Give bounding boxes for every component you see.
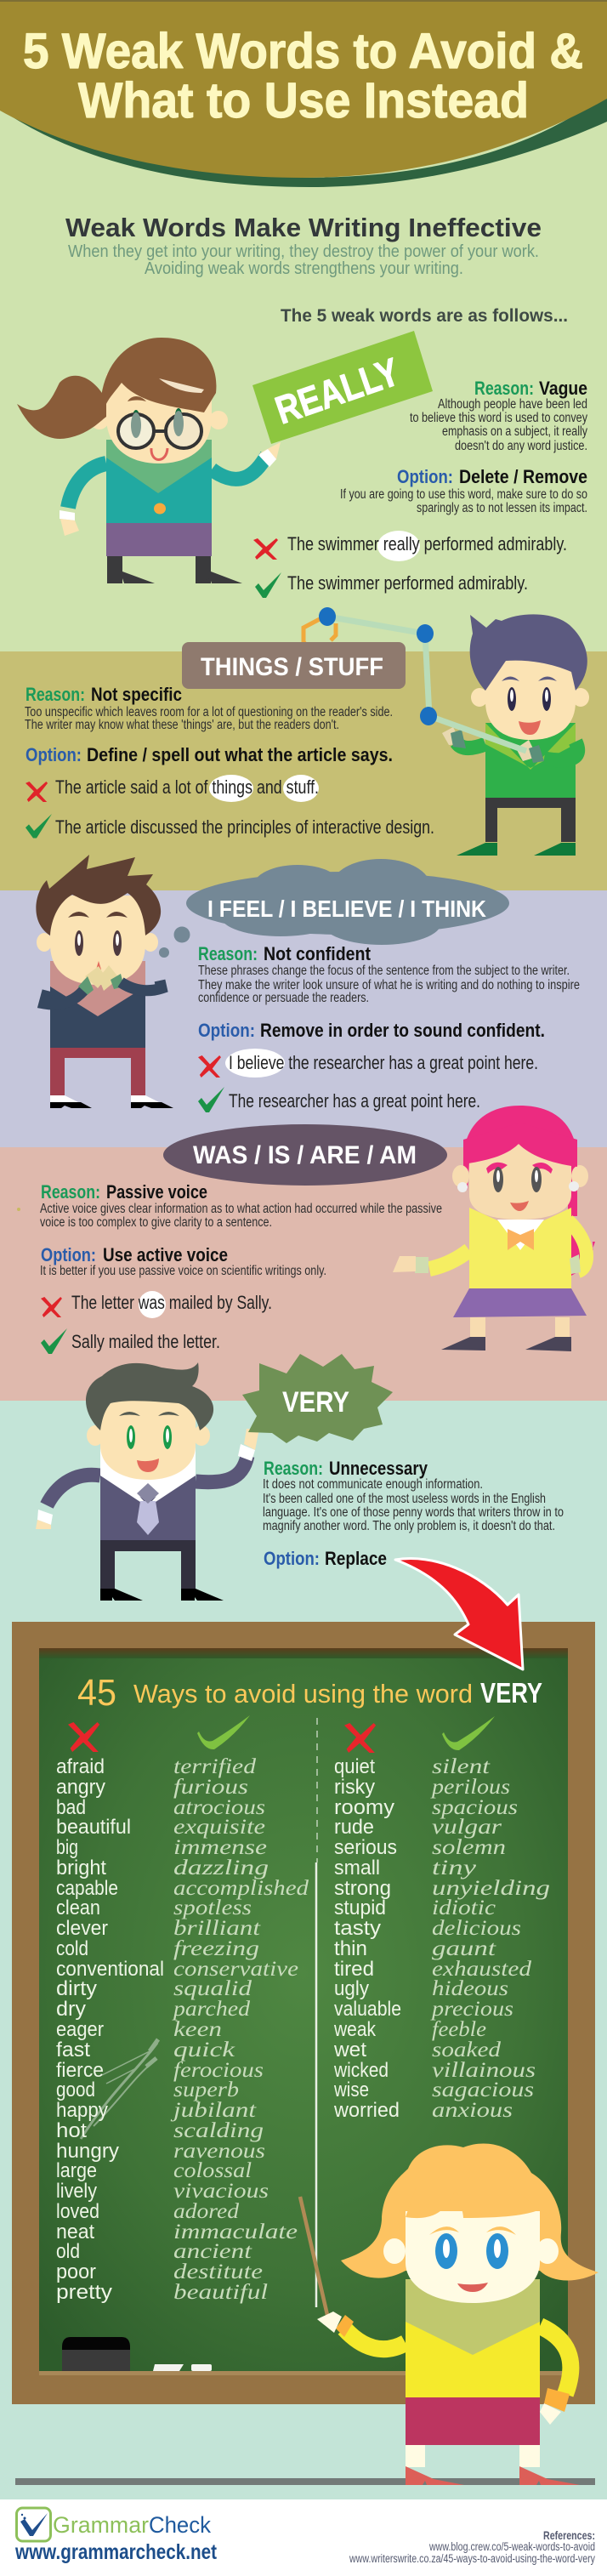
character: thinking man bbox=[36, 855, 173, 1108]
word column 3: worried bbox=[333, 2099, 400, 2122]
logo: grammarcheck bbox=[17, 2508, 211, 2541]
word column 3: small bbox=[334, 1857, 380, 1879]
reason: not specific: The writer may know what these 'things' are, but the readers don't. bbox=[25, 718, 339, 732]
word column 2: ferocious bbox=[173, 2059, 264, 2082]
word column 4: villainous bbox=[432, 2059, 536, 2082]
reason: unnecessary: It does not communicate enough information. bbox=[263, 1477, 483, 1492]
intro text: When they get into your writing, they destroy the power of your work. bbox=[68, 242, 539, 261]
word column 4: feeble bbox=[432, 2018, 486, 2041]
reason: passive voice: Passive voice bbox=[106, 1181, 207, 1203]
word column 2: parched bbox=[172, 1998, 251, 2021]
reason: unnecessary: It's been called one of the most useless words in the English bbox=[263, 1492, 546, 1506]
chalk pieces bbox=[153, 2364, 212, 2371]
reason: passive voice: Reason: bbox=[41, 1181, 100, 1203]
word column 1: pretty bbox=[56, 2281, 112, 2304]
word column 1: eager bbox=[56, 2018, 104, 2041]
option: replace: Replace bbox=[325, 1548, 387, 1569]
word column 1: conventional bbox=[56, 1958, 164, 1981]
option: remove: Remove in order to sound confident. bbox=[260, 1020, 545, 1041]
eraser bbox=[62, 2337, 130, 2371]
word column 1: fierce bbox=[56, 2059, 104, 2082]
sign: really: REALLY bbox=[269, 349, 405, 432]
reason: vague bbox=[410, 378, 587, 453]
word column 4: vulgar bbox=[432, 1816, 502, 1839]
word column 3: tired bbox=[334, 1958, 374, 1981]
website url: www.grammarcheck.net bbox=[14, 2540, 218, 2564]
option: use active voice: It is better if you use passive voice on scientific writings only. bbox=[40, 1264, 326, 1278]
word column 2: vivacious bbox=[173, 2180, 269, 2203]
reason: not specific: Not specific bbox=[91, 684, 182, 705]
option: use active voice: Use active voice bbox=[103, 1244, 228, 1265]
word column 4: gaunt bbox=[432, 1937, 496, 1960]
intro text bbox=[68, 242, 539, 278]
header banner bbox=[0, 0, 607, 187]
word column 2: ancient bbox=[173, 2240, 252, 2263]
word column 2: destitute bbox=[173, 2260, 263, 2283]
reason: not confident: Reason: bbox=[198, 943, 258, 964]
logo: grammarcheck: Grammar bbox=[53, 2512, 149, 2538]
word column 2: conservative bbox=[173, 1958, 298, 1981]
icon: chalk check right bbox=[442, 1716, 495, 1750]
chalk smudge bbox=[81, 2039, 158, 2139]
icon: chalk check left bbox=[197, 1715, 250, 1749]
word column 3: tasty bbox=[334, 1917, 381, 1940]
word column 1: bright bbox=[56, 1857, 106, 1879]
option: define: Define / spell out what the article says. bbox=[87, 744, 393, 765]
arrow: red, pointing to blackboard bbox=[395, 1558, 523, 1669]
reason: not specific bbox=[25, 684, 393, 732]
word column 2: spotless bbox=[173, 1896, 252, 1919]
word column 2: terrified bbox=[173, 1755, 257, 1778]
reason: not specific: Too unspecific which leaves room for a lot of questioning on the reader's side. bbox=[25, 705, 393, 719]
word column 1 bbox=[56, 1755, 164, 2304]
character: teacher bbox=[300, 2143, 598, 2485]
word column 1: loved bbox=[56, 2200, 99, 2223]
word column 4: exhausted bbox=[432, 1958, 532, 1981]
icon: chalk x right bbox=[344, 1723, 376, 1753]
word column 1: hungry bbox=[56, 2140, 119, 2163]
word column 1: clever bbox=[56, 1917, 108, 1940]
board title: Ways to avoid using the word bbox=[133, 1679, 473, 1709]
thought bubble: i feel / i believe / i think bbox=[159, 859, 509, 958]
word column 1: poor bbox=[56, 2260, 96, 2283]
word column 3: quiet bbox=[334, 1755, 375, 1778]
word column 3: serious bbox=[334, 1836, 397, 1859]
word column 3 bbox=[333, 1755, 401, 2122]
icon: green check bbox=[255, 572, 281, 598]
word column 2: exquisite bbox=[173, 1816, 265, 1839]
heading: weak words make writing ineffective: Weak Words Make Writing Ineffective bbox=[65, 213, 542, 242]
word column 3: wise bbox=[333, 2078, 369, 2101]
word column 2: superb bbox=[173, 2078, 239, 2101]
title: What to Use Instead bbox=[78, 73, 529, 128]
panel: was / is / are / am bbox=[0, 1106, 607, 1401]
board title: VERY bbox=[480, 1677, 542, 1709]
option: replace bbox=[264, 1548, 387, 1569]
word column 4: idiotic bbox=[432, 1896, 496, 1919]
banner: things / stuff bbox=[182, 642, 406, 689]
word column 4: unyielding bbox=[432, 1877, 550, 1900]
word column 1: capable bbox=[56, 1877, 118, 1900]
example: right sentence: The researcher has a great point here. bbox=[229, 1090, 480, 1112]
reason: vague: Vague bbox=[539, 378, 587, 399]
example: wrong sentence: I believe the researcher has a great point here. bbox=[229, 1052, 538, 1073]
icon: green check bbox=[26, 814, 52, 839]
reason: unnecessary: Reason: bbox=[264, 1458, 323, 1479]
word column 1: afraid bbox=[56, 1755, 105, 1778]
word column 1: cold bbox=[56, 1937, 88, 1960]
icon: chalk x left bbox=[68, 1722, 99, 1752]
word column 2: quick bbox=[173, 2039, 235, 2061]
word column 3: wet bbox=[333, 2039, 366, 2061]
example: wrong sentence bbox=[287, 531, 567, 561]
icon: red x bbox=[198, 1055, 221, 1078]
panel: footer bbox=[0, 2499, 607, 2576]
references bbox=[349, 2528, 595, 2565]
word column 2: immaculate bbox=[173, 2221, 298, 2243]
word column 3: risky bbox=[334, 1776, 375, 1799]
panel: very bbox=[0, 1354, 607, 2499]
icon: green check bbox=[41, 1328, 67, 1354]
word column 2: ravenous bbox=[173, 2140, 265, 2163]
word column 1: good bbox=[56, 2078, 95, 2101]
word column 1: large bbox=[56, 2159, 97, 2182]
word column 4: sagacious bbox=[432, 2078, 534, 2101]
example: right sentence: The swimmer performed admirably. bbox=[287, 572, 528, 594]
intro text: Avoiding weak words strengthens your writing. bbox=[145, 259, 463, 278]
option: delete or remove bbox=[340, 466, 587, 515]
word column 2: beautiful bbox=[173, 2281, 268, 2304]
word column 2: atrocious bbox=[173, 1796, 265, 1819]
badge: very: VERY bbox=[282, 1386, 349, 1419]
word column 4: anxious bbox=[432, 2099, 513, 2122]
icon: red x bbox=[253, 538, 278, 560]
character: man with purple hair bbox=[420, 614, 589, 856]
floor line bbox=[15, 2478, 595, 2485]
word column 4: solemn bbox=[432, 1836, 506, 1859]
option: replace: Option: bbox=[264, 1548, 320, 1569]
word column 3: wicked bbox=[333, 2059, 389, 2082]
icon: red x bbox=[26, 782, 48, 802]
word column 2: squalid bbox=[173, 1977, 252, 2000]
word column 2: adored bbox=[173, 2200, 240, 2223]
word column 1: happy bbox=[56, 2099, 108, 2122]
title: 5 Weak Words to Avoid & bbox=[23, 24, 583, 79]
word column 1: dirty bbox=[56, 1977, 97, 2000]
word column 4: hideous bbox=[432, 1977, 508, 2000]
word column 2: keen bbox=[173, 2018, 222, 2041]
word column 1: lively bbox=[56, 2180, 97, 2203]
character: man in suit bbox=[36, 1362, 259, 1601]
example: wrong sentence bbox=[71, 1291, 272, 1318]
option: use active voice: Option: bbox=[41, 1244, 96, 1265]
word column 3: roomy bbox=[334, 1796, 394, 1819]
reason: not confident: Not confident bbox=[264, 943, 372, 964]
word column 1: big bbox=[56, 1836, 78, 1859]
banner: was / is / are / am bbox=[163, 1124, 447, 1186]
word column 2 bbox=[170, 1755, 309, 2304]
logo: grammarcheck: Check bbox=[149, 2512, 211, 2538]
word column 4: soaked bbox=[432, 2039, 502, 2061]
reason: passive voice: voice is too complex to give clarity to a sentence. bbox=[40, 1215, 272, 1230]
reason: unnecessary bbox=[263, 1458, 564, 1533]
word column 2: accomplished bbox=[173, 1877, 309, 1900]
word column 1: fast bbox=[56, 2039, 90, 2061]
panel: things / stuff bbox=[0, 607, 607, 890]
word column 2: jubilant bbox=[170, 2099, 257, 2122]
blackboard bbox=[12, 1622, 595, 2404]
subheading: the 5 weak words: The 5 weak words are as follows... bbox=[281, 306, 568, 326]
reason: not specific: Reason: bbox=[26, 684, 85, 705]
word column 2: furious bbox=[173, 1776, 248, 1799]
option: use active voice bbox=[40, 1244, 326, 1278]
option: delete or remove: Delete / Remove bbox=[459, 466, 587, 487]
board title bbox=[77, 1672, 542, 1714]
word column 4: spacious bbox=[432, 1796, 518, 1819]
banner: things / stuff: THINGS / STUFF bbox=[201, 653, 383, 681]
word column 4 bbox=[430, 1755, 550, 2122]
word column 1: neat bbox=[56, 2221, 94, 2243]
example: wrong sentence: The letter was mailed by Sally. bbox=[71, 1292, 272, 1313]
option: remove: Option: bbox=[198, 1020, 255, 1041]
character: woman with pink hair bbox=[393, 1106, 595, 1351]
board title: 45 bbox=[77, 1672, 116, 1714]
thought bubble: i feel / i believe / i think: I FEEL / I BELIEVE / I THINK bbox=[207, 896, 486, 922]
word column 3: weak bbox=[333, 2018, 377, 2041]
reason: vague: Reason: bbox=[474, 378, 534, 399]
reason: passive voice: Active voice gives clear information as to what action had occurred while the passive bbox=[40, 1202, 442, 1216]
word column 2: dazzling bbox=[173, 1857, 269, 1879]
word column 1: bad bbox=[56, 1796, 86, 1819]
reason: unnecessary: Unnecessary bbox=[329, 1458, 428, 1479]
option: delete or remove: Option: bbox=[397, 466, 453, 487]
reason: not confident bbox=[198, 943, 580, 1005]
icon: mechanical arm bbox=[304, 607, 434, 716]
word column 1: clean bbox=[56, 1896, 100, 1919]
panel: header and intro bbox=[0, 0, 607, 655]
word column 1: old bbox=[56, 2240, 80, 2263]
word column 4: delicious bbox=[432, 1917, 521, 1940]
icon: green check bbox=[198, 1087, 224, 1112]
word column 2: freezing bbox=[173, 1937, 259, 1960]
example: right sentence: Sally mailed the letter. bbox=[71, 1331, 220, 1352]
reason: not confident: confidence or persuade the readers. bbox=[198, 991, 369, 1005]
word column 4: tiny bbox=[432, 1857, 477, 1879]
word column 4: perilous bbox=[430, 1776, 510, 1799]
word column 2: scalding bbox=[173, 2119, 264, 2142]
banner: was / is / are / am: WAS / IS / ARE / AM bbox=[193, 1141, 417, 1169]
bullet dot bbox=[17, 1208, 20, 1211]
example: wrong sentence: The article said a lot of things and stuff. bbox=[55, 776, 319, 798]
example: right sentence: The article discussed the principles of interactive design. bbox=[55, 816, 434, 838]
word column 1: dry bbox=[56, 1998, 86, 2021]
word column 1: hot bbox=[56, 2119, 87, 2142]
board divider bbox=[316, 1718, 317, 2307]
word column 3: thin bbox=[334, 1937, 367, 1960]
word column 1: angry bbox=[56, 1776, 105, 1799]
character: woman with glasses bbox=[17, 338, 281, 583]
word column 3: valuable bbox=[334, 1998, 401, 2021]
word column 2: immense bbox=[173, 1836, 267, 1859]
badge: very bbox=[242, 1354, 393, 1443]
word column 4: precious bbox=[430, 1998, 513, 2021]
word column 2: colossal bbox=[173, 2159, 252, 2182]
panel: i feel / i believe / i think bbox=[0, 855, 607, 1147]
option: define: Option: bbox=[26, 744, 82, 765]
example: wrong sentence bbox=[55, 775, 319, 802]
word column 3: stupid bbox=[334, 1896, 386, 1919]
icon: red x bbox=[41, 1297, 62, 1317]
word column 3: rude bbox=[334, 1816, 374, 1839]
reason: passive voice bbox=[40, 1181, 442, 1230]
example: wrong sentence bbox=[225, 1049, 538, 1078]
word column 4: silent bbox=[432, 1755, 491, 1778]
word column 2: brilliant bbox=[173, 1917, 261, 1940]
word column 1: beautiful bbox=[56, 1816, 131, 1839]
word column 3: strong bbox=[334, 1877, 391, 1900]
title bbox=[23, 24, 583, 128]
word column 3: ugly bbox=[334, 1977, 369, 2000]
